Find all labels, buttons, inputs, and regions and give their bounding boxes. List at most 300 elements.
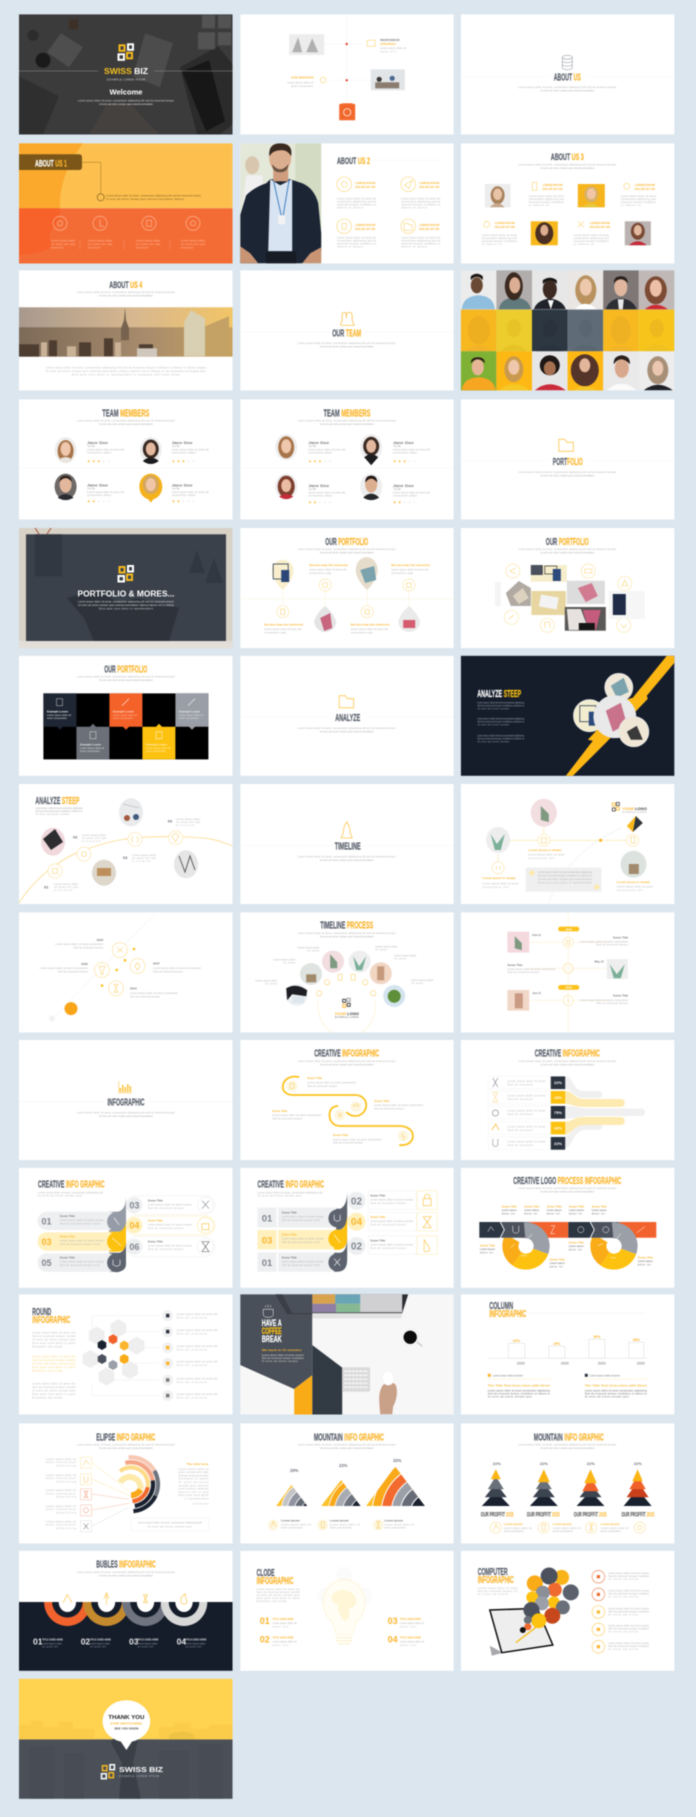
- slide 36: mountain layered trees: [461, 1423, 674, 1544]
- drop icons: [94, 942, 145, 996]
- feature: top right: eiusmod tempor incididunt ut: [401, 202, 440, 206]
- team text bottom 2: ut labore et: [574, 242, 594, 246]
- connector lines: [92, 1463, 129, 1526]
- photo: office top view: [289, 34, 324, 55]
- left text yellow: Ut enim ad minim veniam quis: [32, 1361, 76, 1365]
- member 4 text: ★★★★★: [172, 498, 197, 503]
- grid cell: yellow: Example Lorem: [146, 743, 167, 747]
- member 1 text: Your Title: [87, 444, 96, 448]
- numbered item 2: Lorem ipsum dolor: [90, 1642, 110, 1646]
- team text top 2: eiusmod tempor incididunt: [621, 200, 656, 204]
- intro text: [518, 547, 616, 554]
- feature: top right: LOREM IPSUM: [419, 181, 440, 185]
- top labels: Some Title: [569, 1205, 584, 1209]
- team text top 2: ut labore et: [621, 203, 641, 207]
- photo: woman yellow background: [578, 184, 605, 207]
- title: COLUMN: [489, 1300, 513, 1312]
- yellow dots: [101, 948, 135, 987]
- snake label 2: Sed do eiusmod tempor: [374, 1106, 404, 1110]
- intro text: Ut enim ad minim veniam quis nostrud exercitation ullamco laboris nisi ut aliquip: [78, 603, 175, 607]
- member 1 text: Lorem ipsum dolor sit amet elit: [87, 447, 124, 451]
- coffee heading: COFFEE: [262, 1326, 282, 1336]
- percent labels: 32%: [393, 1458, 402, 1463]
- title: CREATIVE INFO GRAPHIC: [38, 1179, 105, 1191]
- member 1 text: consectetur adipis: [308, 450, 333, 454]
- member 3 text: Lorem ipsum dolor sit amet elit: [87, 490, 124, 494]
- feature: top left: Lorem ipsum dolor sit amet elit: [337, 196, 376, 200]
- main panel: [240, 1294, 312, 1389]
- numbered item 1: Lorem ipsum dolor: [42, 1642, 62, 1646]
- step text: Lorem ipsum dolor: [176, 817, 200, 821]
- team text top 1: [529, 182, 564, 207]
- return note: Ut enim ad minim veniam: [262, 1359, 298, 1363]
- icon: bar chart: [118, 1081, 132, 1093]
- avatar 3: [275, 474, 297, 500]
- legend right: Sed do eiusmod tempor incididunt ut labore et: [585, 1391, 647, 1395]
- intro text: [518, 470, 616, 477]
- side labels: Lorem ipsum: [480, 1247, 495, 1251]
- step text: Lorem ipsum dolor: [54, 882, 78, 886]
- ring icons: [63, 1593, 187, 1605]
- slide 29: creative info graphic squares: [240, 1168, 454, 1288]
- keyboard: [342, 1367, 370, 1392]
- right list text: Lorem ipsum dolor sit amet elit: [177, 1344, 218, 1348]
- right list text: Ut enim ad minim: [608, 1595, 638, 1599]
- bottom row portraits: [461, 351, 674, 390]
- profit labels: OUR PROFFIT 2025: [574, 1512, 607, 1518]
- slide 2: responsive strategy timeline: [240, 14, 454, 134]
- row text: Lorem ipsum dolor sit amet: [507, 1124, 546, 1128]
- bottom text: [504, 1522, 629, 1533]
- right text: Lorem ipsum dolor sit amet consec: [148, 1244, 192, 1248]
- snake label 1: Some Title: [307, 1076, 323, 1080]
- bottom text: Lorem ipsum dolor sit: [504, 1526, 532, 1530]
- bubble cluster: [520, 1568, 579, 1633]
- percentage squares: 75%: [554, 1110, 562, 1115]
- label left: consectetur elit: [482, 885, 509, 889]
- team text bottom 2: Lorem ipsum dolor sit amet: [574, 233, 609, 237]
- team text top 1: ut labore et: [529, 203, 549, 207]
- title: OUR TEAM: [332, 327, 361, 339]
- right text: Some Title: [370, 1215, 386, 1219]
- intro text: Lorem ipsum dolor sit amet, consectetur adipiscing elit sed do eiusmod tempor: [518, 1443, 616, 1447]
- member 2 text: consectetur adipis: [172, 450, 196, 454]
- left text gray: Excepteur sint occae: [32, 1344, 63, 1348]
- slide 5: about us 2: [240, 143, 454, 264]
- right numbers: [126, 1197, 142, 1255]
- right text: voluptate: [192, 1501, 209, 1505]
- left list text: [46, 1457, 77, 1530]
- hand and mouse: [379, 1371, 397, 1414]
- left list text: adipiscing: [56, 1526, 77, 1530]
- right text: Lorem ipsum dolor sit amet consec: [148, 1223, 192, 1227]
- grid cell: dark navy: amet consectetur: [47, 716, 67, 720]
- item 03: TITLE GOES HERE: [400, 1617, 421, 1621]
- top labels: Some Title: [547, 1205, 562, 1209]
- left text: Lorem ipsum dolor sit amet consec: [282, 1260, 324, 1264]
- drop: pink mug: [398, 606, 420, 632]
- label bottom 1: But also leap into electronic: [264, 622, 304, 626]
- slide 28: creative info graphic pills: [19, 1168, 233, 1288]
- member 4 text: Your Title: [393, 487, 401, 491]
- callout box: Lorem ipsum dolor sit amet consectetur adipiscing: [538, 870, 592, 874]
- three text blocks: Sed do eiusmod tempor incididunt ut labore et: [477, 720, 524, 724]
- snake label 3: Some Title: [272, 1109, 288, 1113]
- entry text 1: [580, 935, 628, 946]
- photo: city skyline: [19, 307, 233, 357]
- title: [257, 1567, 294, 1587]
- 2024 text: 2024: [130, 986, 137, 990]
- responsive strategy label: RESPONSIVE: [380, 38, 400, 42]
- column chart: [489, 1332, 647, 1365]
- left numbers: 01: [262, 1214, 273, 1225]
- callout labels: [255, 944, 433, 985]
- top labels: dolor sit: [502, 1211, 515, 1215]
- intro text: Duis aute irure dolor in reprehenderit: [99, 606, 153, 610]
- title: CREATIVE INFOGRAPHIC: [535, 1048, 600, 1060]
- intro text: Ut enim ad minim veniam quis: [38, 1194, 83, 1198]
- team text bottom 1: consectetur adipiscing sed: [482, 236, 517, 240]
- separators and icons: [488, 1226, 645, 1258]
- percentage squares: 18%: [554, 1095, 562, 1100]
- left text: Some Title: [60, 1214, 75, 1218]
- numbered item 1: TITLE GOES HERE: [42, 1638, 63, 1642]
- avatar 4: [139, 474, 162, 503]
- intro text: Lorem ipsum dolor sit amet, consectetur adipiscing elit sed do eiusmod tempor: [518, 162, 616, 166]
- description: Ut enim ad minim veniam quis nostrud exercitation ullamco: [106, 197, 185, 201]
- right list text: [608, 1571, 650, 1651]
- intro text: Ut enim ad minim veniam quis nostrud exercitation: [540, 1446, 595, 1450]
- left text: Lorem ipsum dolor sit amet consec: [282, 1215, 324, 1219]
- intro text: Ut enim ad minim veniam quis nostrud exercitation: [99, 1574, 153, 1578]
- right text: Sed do eiusmod tempor: [148, 1226, 184, 1230]
- grid cell: gray: Example Lorem: [179, 710, 200, 714]
- feature: top left: consectetur adipiscing sed do: [337, 199, 377, 203]
- numbered item 3: TITLE GOES HERE: [138, 1638, 158, 1642]
- label top 2: [391, 563, 431, 575]
- growth curve: [19, 837, 233, 903]
- bottom text: Lorem Ipsum: [553, 1522, 572, 1526]
- photo: woman gray background: [625, 221, 651, 245]
- right list text: Sed do eiusmod: [177, 1395, 207, 1399]
- top labels: Lorem ipsum: [547, 1208, 562, 1212]
- our services label: Lorem ipsum dolor sit: [287, 80, 313, 84]
- intro text: Ut enim ad minim veniam quis nostrud exercitation: [320, 344, 374, 348]
- right text: Some Title: [148, 1199, 163, 1203]
- right text: [178, 1462, 209, 1505]
- intro text: Ut enim ad minim veniam quis nostrud exercitation: [320, 858, 374, 862]
- entry text 2: Some Title: [507, 963, 523, 967]
- numbered item 4: Lorem ipsum dolor: [185, 1642, 206, 1646]
- right text: [148, 1199, 192, 1251]
- callout labels: Lorem ipsum dolor: [394, 953, 416, 957]
- team text top 1: eiusmod tempor incididunt: [529, 200, 564, 204]
- intro text: [298, 1443, 396, 1450]
- tagline: EXAMPLE LOREM IPSUM: [107, 77, 145, 81]
- right list text: Lorem ipsum dolor sit amet consec: [608, 1641, 650, 1645]
- intro text: Ut enim ad minim veniam quis: [257, 1593, 300, 1597]
- intro text: Ut enim ad minim veniam quis nostrud exercitation: [320, 934, 374, 938]
- entry text 2: Lorem ipsum dolor sit amet consectetur: [507, 967, 556, 971]
- slide 18: analyze steep dark: [461, 656, 674, 776]
- orange gear tag: [339, 103, 355, 120]
- team text bottom 1: [482, 221, 517, 246]
- colored hexagons: [98, 1334, 128, 1370]
- slide 27: creative infographic percentages: [461, 1040, 674, 1160]
- team text top 2: LOREM IPSUM: [635, 183, 655, 187]
- left list text: adipiscing: [56, 1479, 77, 1483]
- right list text: Lorem ipsum dolor sit amet elit: [177, 1328, 218, 1332]
- slide 25: infographic divider: [19, 1040, 233, 1160]
- speech bubble: THANK YOU: [108, 1715, 145, 1721]
- feature: bottom right: [401, 219, 441, 248]
- connector lines: [92, 1316, 159, 1396]
- right list text: Ut enim ad minim: [608, 1612, 638, 1616]
- top row portraits: [461, 270, 674, 310]
- bottom icons: [268, 1520, 384, 1530]
- intro text: [478, 1586, 518, 1596]
- tree 4: [624, 1469, 652, 1506]
- member 2 text: consectetur adipis: [393, 450, 418, 454]
- four column text: eiusmod: [88, 245, 101, 249]
- title: COMPUTER: [478, 1566, 508, 1578]
- donut 1 lower segments: [510, 1238, 541, 1262]
- left text gray: Ut enim ad minim veniam quis: [32, 1337, 76, 1341]
- welcome heading: Welcome: [110, 89, 143, 96]
- feature: top right: DOLOR SIT AM: [419, 185, 440, 189]
- title: CLODE: [257, 1567, 275, 1579]
- left numbers: 03: [262, 1236, 272, 1247]
- icon: folder: [339, 696, 354, 708]
- lightning bolt: [566, 656, 674, 776]
- callout labels: sit amet: [283, 960, 295, 964]
- top labels: Lorem ipsum: [592, 1208, 607, 1212]
- intro text: Ut enim ad minim veniam quis nostrud exercitation: [540, 473, 595, 477]
- column chart: 2020: [561, 1361, 569, 1365]
- top labels: dolor sit: [569, 1211, 582, 1215]
- left text yellow: Lorem ipsum dolor sit amet elit: [32, 1354, 76, 1358]
- right text: Lorem ipsum dolor sit: [178, 1467, 209, 1471]
- avatar 1: [275, 434, 297, 460]
- legend left: Lorem ipsum dolor sit amet consectetur adipiscing: [488, 1388, 550, 1392]
- intro text: Lorem ipsum dolor sit amet, consectetur adipiscing elit sed do eiusmod tempor: [78, 98, 174, 102]
- right list icons: [162, 1310, 173, 1401]
- callout labels: sit amet: [265, 981, 277, 985]
- drop: navy notebooks: [272, 560, 294, 590]
- panel photo shadows: [35, 534, 223, 641]
- right list text: [177, 1312, 218, 1399]
- drop: pink envelope: [314, 606, 336, 632]
- tree 2: [530, 1469, 558, 1506]
- entry text 1: Sed do eiusmod tempor: [596, 942, 628, 946]
- item 01: [260, 1616, 297, 1628]
- feature: top right: consectetur adipiscing sed do: [401, 199, 441, 203]
- intro text: Lorem ipsum dolor sit amet, consectetur adipiscing elit sed do eiusmod tempor: [298, 931, 396, 935]
- intro text: Ut enim ad minim veniam quis nostrud exercitation: [320, 1062, 374, 1066]
- four column text: sit amet elit sed: [136, 242, 161, 246]
- grid cell: yellow: amet consectetur: [146, 749, 166, 753]
- slide 33: column infographic: [461, 1294, 674, 1414]
- title: INFOGRAPHIC: [257, 1575, 294, 1587]
- note box: Lorem ipsum dolor sit amet, consectetur adipiscing elit: [138, 1521, 202, 1525]
- intro text: [77, 418, 175, 426]
- member 2 text: Your Title: [172, 444, 180, 448]
- member 3 text: ★★★★★: [308, 499, 333, 504]
- grid cell: gray: [175, 693, 208, 730]
- intro text: Lorem ipsum dolor sit amet, consectetur adipiscing elit sed do eiusmod tempor: [298, 1443, 396, 1447]
- right boxes: [368, 1191, 437, 1254]
- photo: meeting: [371, 69, 405, 90]
- slide 8: our team divider: [240, 270, 454, 390]
- icon: sun: [320, 77, 326, 83]
- feature: bottom right: DOLOR SIT AM: [419, 227, 440, 231]
- side labels: dolor sit: [480, 1250, 493, 1254]
- left text gray: Duis aute irure dolor in repre: [32, 1341, 76, 1345]
- right numbers: 02: [351, 1242, 362, 1253]
- label top 1: But also leap into electronic: [309, 563, 349, 567]
- four column text: eiusmod: [181, 245, 194, 249]
- intro text: Lorem ipsum dolor sit amet, consectetur adipiscing elit sed do eiusmod tempor: [298, 1059, 396, 1063]
- node circles: [563, 937, 573, 1006]
- callout box: Ut enim ad minim veniam quis nostrud exerci: [538, 877, 592, 881]
- member 2 text: Jane Doe: [393, 441, 414, 445]
- intro text: Ut enim ad minim veniam: [35, 812, 69, 816]
- profit labels: OUR PROFFIT 2025: [481, 1512, 514, 1518]
- callout box: Duis aute irure dolor in reprehenderit: [538, 880, 592, 884]
- right text: [370, 1194, 414, 1250]
- slide 12: portfolio divider: [461, 399, 674, 520]
- item 03: [388, 1616, 424, 1628]
- intro text: [298, 931, 396, 938]
- title: ABOUT US 2: [337, 156, 370, 167]
- right list text: Lorem ipsum dolor sit amet consec: [608, 1571, 650, 1575]
- avatar 2: [140, 437, 162, 464]
- bottom text: Lorem Ipsum: [384, 1518, 403, 1522]
- photo: desk objects: [19, 19, 233, 134]
- speech bubble: [103, 1700, 150, 1750]
- row text: Sed do eiusmod: [507, 1082, 533, 1086]
- left numbers: 01: [262, 1258, 273, 1269]
- slide 16: our portfolio black grid: [19, 656, 233, 776]
- column chart: 2020: [517, 1361, 525, 1365]
- 2027 text: Lorem ipsum dolor sit amet consectetur: [153, 966, 201, 970]
- column chart: 38%: [633, 1338, 641, 1342]
- intro text: [298, 1059, 396, 1066]
- label center: [528, 848, 565, 860]
- curve icons: [48, 831, 183, 878]
- bottom text: Lorem ipsum dolor sit: [384, 1522, 414, 1526]
- legend left: Ut enim ad minim veniam quis: [488, 1394, 533, 1398]
- icon: database stack: [562, 55, 572, 70]
- left text lower: [32, 1381, 76, 1399]
- left list text: amet consectetur: [46, 1476, 76, 1480]
- spiral chart: [120, 1457, 158, 1511]
- title: CREATIVE LOGO PROCESS INFOGRAPHIC: [513, 1175, 622, 1187]
- step labels: 01: [44, 884, 49, 890]
- left numbers: 01: [42, 1217, 52, 1227]
- snake label 4: Some Title: [333, 1133, 348, 1137]
- left text: Some Title: [60, 1256, 75, 1260]
- four column text: sit amet elit sed: [181, 242, 206, 246]
- grid cell: slate: [76, 724, 109, 759]
- process band: [479, 1222, 656, 1238]
- left list text: adipiscing: [56, 1495, 77, 1499]
- label bottom 1: Lorem ipsum dolor sit amet elit: [264, 627, 301, 631]
- four circle icons: [53, 216, 200, 230]
- step text: [54, 817, 201, 892]
- right text: Sed do eiusmod tempor: [148, 1206, 184, 1210]
- right list text: Lorem ipsum dolor sit amet elit: [177, 1360, 218, 1364]
- 2025 text: [55, 938, 104, 949]
- step labels: 04: [168, 818, 173, 824]
- right pills: [126, 1196, 215, 1257]
- left text lower: Ut enim ad minim veniam quis: [32, 1388, 76, 1392]
- 2025 text: Sed do eiusmod tempor: [73, 945, 103, 949]
- left pills: [38, 1212, 126, 1272]
- team text top 2: Lorem ipsum dolor sit amet: [621, 194, 656, 198]
- photo drops: [41, 798, 198, 886]
- brand name: SWISS BIZ: [104, 67, 148, 76]
- right list text: Sed do eiusmod: [177, 1315, 207, 1319]
- right list text: Sed do eiusmod: [177, 1347, 207, 1351]
- step text: Lorem ipsum dolor: [82, 833, 106, 837]
- right icons: [197, 1197, 213, 1255]
- step text: eiusmod: [54, 888, 73, 892]
- title: INFOGRAPHIC: [108, 1096, 145, 1108]
- numbered item 1: sit amet elit: [42, 1645, 58, 1649]
- left text: Sed do eiusmod tempor incid: [282, 1240, 320, 1244]
- numbered item 2: [81, 1637, 111, 1649]
- 2025 text: Lorem ipsum dolor sit amet consectetur: [55, 942, 103, 946]
- label left: [482, 876, 519, 889]
- intro text: Ut enim ad minim veniam quis nostrud exercitation: [320, 550, 374, 554]
- slide 40: thank you: [19, 1679, 233, 1799]
- side labels: Some Title: [638, 1256, 653, 1260]
- grid cell: orange: Lorem ipsum dolor sit: [113, 713, 137, 717]
- member 1 text: [87, 441, 124, 463]
- four column text: sit amet elit sed: [88, 242, 113, 246]
- member 1 text: ★★★★★: [308, 458, 333, 463]
- intro text: [518, 1186, 616, 1194]
- city silhouette: [19, 1721, 233, 1799]
- monitor edge on panel: [275, 1294, 312, 1314]
- side labels: [480, 1241, 653, 1268]
- member 4 text: consectetur adipis: [393, 493, 418, 497]
- numbered item 3: [129, 1637, 158, 1649]
- slide 37: bubbles infographic: [19, 1551, 233, 1671]
- intro text: [78, 98, 174, 106]
- member 2 text: Your Title: [393, 444, 401, 448]
- left text lower: Lorem ipsum dolor sit amet elit: [32, 1381, 76, 1385]
- snake label 1: [307, 1076, 356, 1088]
- feature: bottom left: Lorem ipsum dolor sit amet elit: [337, 235, 376, 239]
- right text: Lorem ipsum dolor sit amet consec: [370, 1219, 414, 1223]
- legend left: The Title Text Goes Here with Short: [488, 1384, 550, 1388]
- right text: incididunt ut labore: [178, 1477, 209, 1481]
- intro text: [518, 164, 616, 170]
- four column text: eiusmod: [51, 245, 64, 249]
- title label: ABOUT US 1: [35, 158, 67, 169]
- top labels: Lorem ipsum: [502, 1208, 517, 1212]
- title: ABOUT US: [554, 71, 581, 83]
- label top 1: [309, 563, 349, 575]
- slide 19: analyze steep curve: [19, 784, 233, 904]
- four column text: Lorem ipsum dolor: [181, 238, 205, 242]
- 2025 text: 2025: [97, 938, 104, 942]
- label right: Lorem ipsum dolor sit amet: [617, 884, 653, 888]
- intro text: Excepteur sint occae: [257, 1599, 287, 1603]
- three text blocks: Ut enim ad minim veniam: [477, 723, 509, 727]
